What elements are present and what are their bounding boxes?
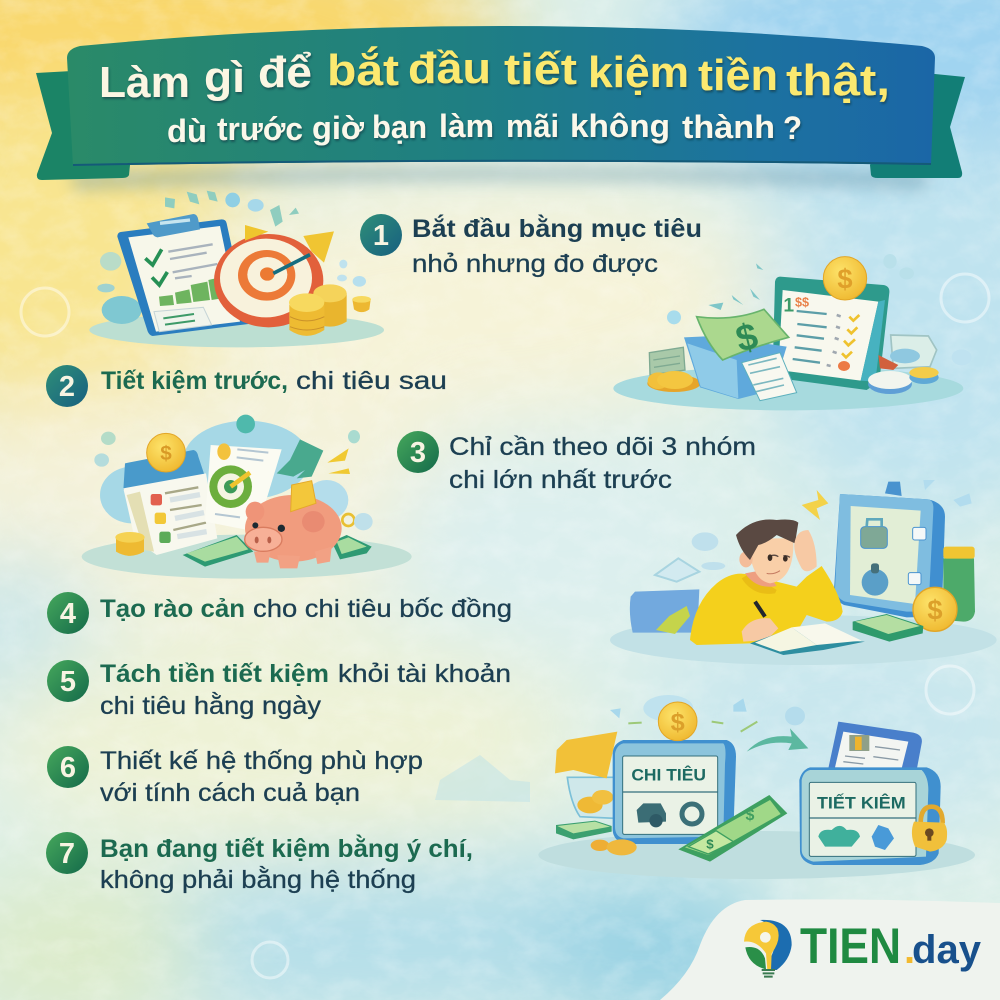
banner left tail (36, 70, 130, 180)
title line 1: gì (204, 53, 245, 102)
illustration: clipboard, target and coins (89, 191, 384, 347)
item 4 (47, 592, 512, 634)
illustration: chi tiêu and tiết kiệm boxes (538, 695, 975, 879)
receipt (742, 353, 797, 401)
glass with gold (555, 732, 617, 818)
item 4 text: cho chi tiêu bốc đồng (253, 595, 512, 623)
badge 5 (47, 660, 89, 702)
small banknote and coins (556, 821, 612, 839)
title line 1: thật, (786, 56, 890, 105)
item 3 text: Chỉ cần theo dõi 3 nhóm (449, 433, 756, 461)
title line 2: làm (439, 108, 494, 144)
title line 1: kiệm (588, 48, 689, 97)
item 6 text: với tính cách cuả bạn (100, 779, 360, 807)
title line 1: đầu (408, 44, 491, 93)
banknotes fan (678, 795, 787, 862)
calendar (123, 433, 217, 555)
badge 3: 3 (410, 437, 426, 469)
item 5 text: chi tiêu hằng ngày (100, 691, 322, 720)
coin stacks (289, 284, 371, 336)
illustration: calendar, goal sheet and piggy bank (82, 415, 412, 579)
title line 2: ? (783, 110, 802, 146)
wordmark: . (904, 928, 915, 972)
badge 4 (47, 592, 89, 634)
item 5 (47, 660, 511, 720)
wordmark: day (912, 928, 982, 972)
item 2 (46, 365, 447, 407)
item 2 text: chi tiêu sau (296, 367, 447, 395)
banner shadow (70, 166, 930, 190)
safe (834, 482, 945, 617)
item 1 (360, 213, 702, 278)
title line 1: tiết (504, 45, 577, 94)
title line 2: mãi (506, 108, 559, 144)
arrow (747, 728, 808, 752)
goal sheet (205, 443, 282, 532)
illustration: person studying beside a safe (610, 480, 997, 665)
badge 1: 1 (373, 220, 389, 252)
illustration: person studying beside a safe: $ (927, 594, 943, 625)
lightning bolt (802, 490, 828, 520)
checklist board (772, 257, 889, 390)
person (690, 519, 843, 645)
title line 2: bạn (372, 109, 427, 145)
target (214, 225, 334, 327)
jar (943, 547, 975, 622)
banknote: $ (732, 314, 762, 360)
item 6 text: Thiết kế hệ thống phù hợp (100, 747, 423, 775)
logo panel (660, 899, 1000, 1000)
wordmark: TIEN (800, 918, 901, 974)
chi tiêu box (613, 740, 736, 844)
title line 2: thành (682, 109, 775, 145)
item 5 text: khỏi tài khoản (338, 660, 511, 688)
chi tiêu box: CHI TIÊU (631, 766, 706, 785)
banner right tail (870, 72, 965, 178)
checklist board: $$ (795, 296, 809, 310)
badge 1 (360, 214, 402, 256)
title line 1: tiền (698, 51, 778, 100)
checklist board: 1 (783, 296, 794, 317)
checklist board: $ (837, 263, 853, 294)
title banner (36, 26, 965, 190)
banknote (697, 309, 789, 360)
title line 2: không (570, 108, 670, 144)
faint decorative symbols (21, 274, 989, 978)
badge 5: 5 (60, 666, 76, 698)
blue package (630, 589, 699, 634)
item 7 (46, 832, 473, 894)
left coins (647, 371, 701, 392)
title line 1: Làm (99, 58, 190, 107)
illustration: cash, receipt and checklist (613, 254, 972, 410)
badge 2: 2 (59, 371, 75, 403)
padlock (912, 807, 947, 852)
blue box (684, 336, 787, 399)
item 3 (397, 431, 756, 494)
small coins (116, 537, 144, 556)
banknotes fan: $ (706, 836, 714, 851)
badge 3 (397, 431, 439, 473)
cash stacks (183, 535, 253, 567)
badge 7: 7 (59, 838, 75, 870)
item 7 text: không phải bằng hệ thống (100, 865, 416, 894)
badge 6 (47, 746, 89, 788)
item 3 text: chi lớn nhất trước (449, 466, 672, 494)
illustration: chi tiêu and tiết kiệm boxes: $ (671, 709, 685, 737)
flying cash (277, 439, 323, 478)
title line 1: bắt (327, 45, 399, 95)
coin above box (658, 702, 697, 741)
item 4 text: Tạo rào cản (100, 595, 245, 623)
tiết kiệm box (799, 767, 941, 865)
item 2 text: Tiết kiệm trước, (101, 367, 288, 395)
drawer (649, 347, 685, 375)
document tablet (828, 722, 922, 770)
item 7 text: Bạn đang tiết kiệm bằng ý chí, (100, 833, 473, 863)
banknotes fan: $ (746, 807, 755, 824)
title line 2: dù (167, 113, 207, 149)
item 1 text: nhỏ nhưng đo được (412, 250, 658, 278)
icon: light bulb (744, 920, 792, 977)
gold coin (913, 587, 957, 631)
tiết kiệm box: TIẾT KIÊM (817, 793, 906, 812)
badge 7 (46, 832, 88, 874)
piggy bank (245, 481, 373, 568)
title line 2: trước (217, 111, 303, 147)
item 1 text: Bắt đầu bằng mục tiêu (412, 213, 702, 243)
cash stack (853, 614, 923, 642)
item 5 text: Tách tiền tiết kiệm (100, 660, 329, 688)
clipboard (117, 214, 248, 336)
banner body (67, 26, 935, 166)
badge 6: 6 (60, 752, 76, 784)
item 6 (47, 746, 423, 807)
title line 1: để (258, 48, 312, 97)
badge 4: 4 (60, 598, 76, 630)
jar and discs (868, 335, 939, 394)
calendar: $ (160, 442, 172, 465)
badge 2 (46, 365, 88, 407)
title line 2: giờ (312, 110, 364, 146)
open book (750, 628, 865, 655)
